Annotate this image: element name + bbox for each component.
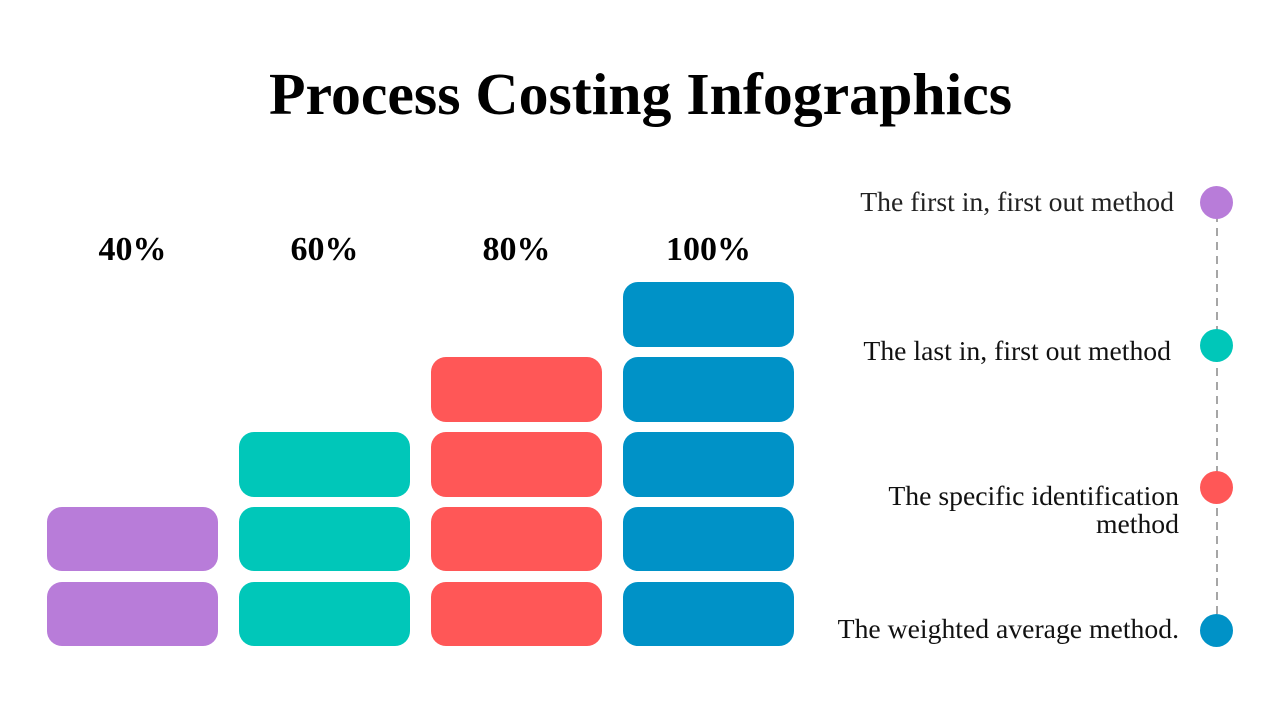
label 100%: 100% <box>666 231 751 268</box>
block <box>623 582 794 646</box>
block <box>239 432 410 497</box>
bar column: 40% <box>47 231 218 646</box>
legend dot: purple <box>1200 186 1233 219</box>
legend text: specific identification: The specific identification <box>888 480 1179 511</box>
label 40%: 40% <box>98 231 166 268</box>
legend dot: teal <box>1200 329 1233 362</box>
bar column: 60% <box>239 231 410 646</box>
block <box>431 357 602 422</box>
block <box>431 507 602 571</box>
legend text: weighted average: The weighted average method. <box>838 613 1179 644</box>
block <box>623 357 794 422</box>
bar column: 80% <box>431 231 602 646</box>
bar column: 100% <box>623 231 794 646</box>
block <box>623 507 794 571</box>
legend text: specific identification: method <box>1096 508 1179 539</box>
label 80%: 80% <box>482 231 550 268</box>
block <box>47 582 218 646</box>
block <box>239 582 410 646</box>
legend text: last in first out: The last in, first out method <box>863 335 1171 366</box>
legend text: specific identification <box>888 480 1179 539</box>
block <box>623 432 794 497</box>
block <box>239 507 410 571</box>
block <box>623 282 794 347</box>
label 60%: 60% <box>290 231 358 268</box>
block <box>431 582 602 646</box>
legend dot: blue <box>1200 614 1233 647</box>
block <box>47 507 218 571</box>
legend text: first in first out: The first in, first out method <box>860 186 1174 217</box>
block <box>431 432 602 497</box>
legend dot: red <box>1200 471 1233 504</box>
title: Process Costing Infographics <box>269 61 1012 127</box>
dashed connector <box>1216 218 1218 614</box>
